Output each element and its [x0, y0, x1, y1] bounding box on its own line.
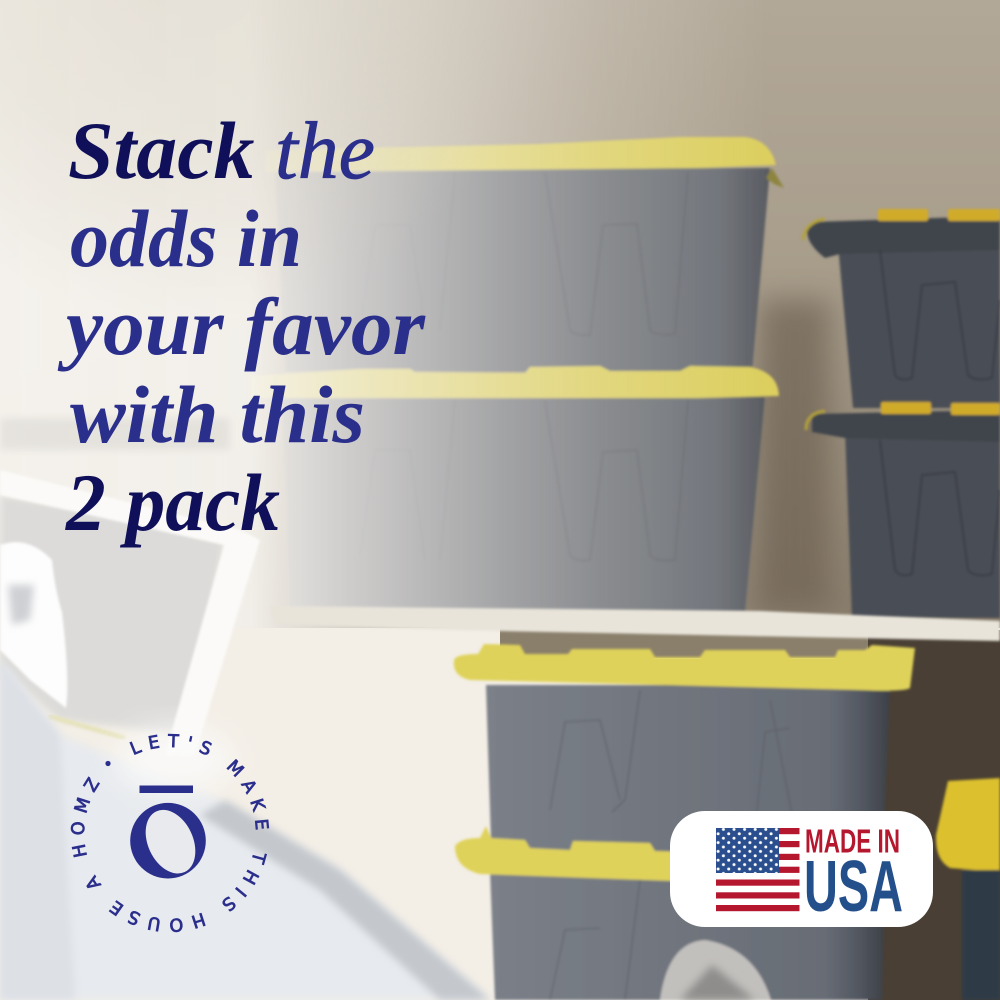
line 5: 2 pack [65, 457, 280, 548]
tote: bottom [455, 826, 885, 1000]
faded window and figure, left [0, 418, 260, 755]
tote: small top right [803, 209, 1000, 408]
line 2: odds in [70, 193, 302, 284]
tote: second large [250, 366, 779, 612]
USA label: USA [804, 847, 903, 927]
logo badge [70, 734, 270, 932]
lower wall [0, 628, 1000, 1000]
headline [57, 105, 426, 548]
foreground rounded object [660, 940, 771, 1000]
made in label: MADE IN [805, 822, 900, 860]
lower storage totes [270, 606, 1000, 1000]
tote: lower [454, 644, 915, 872]
tote: top large [265, 137, 784, 372]
tote: small lower right [806, 402, 1000, 618]
line 3: your favor [57, 281, 426, 372]
icon: American flag [716, 828, 800, 911]
line 4: with this [70, 369, 365, 460]
line 1: Stack the [68, 105, 375, 196]
upper storage totes [250, 137, 1000, 618]
circular tagline: LET'S MAKE THIS HOUSE A HOMZ [70, 734, 270, 932]
made in USA badge [670, 811, 933, 927]
faded car hood, lower left [0, 660, 490, 1000]
badge panel [670, 811, 933, 927]
dim tint at top left [0, 0, 600, 330]
wall shelf [270, 606, 1000, 641]
logo mark: o with macron [130, 786, 206, 882]
yellow tote lid and body, right edge [936, 778, 1000, 1000]
pale overlay fading photo on the left [0, 0, 1000, 630]
